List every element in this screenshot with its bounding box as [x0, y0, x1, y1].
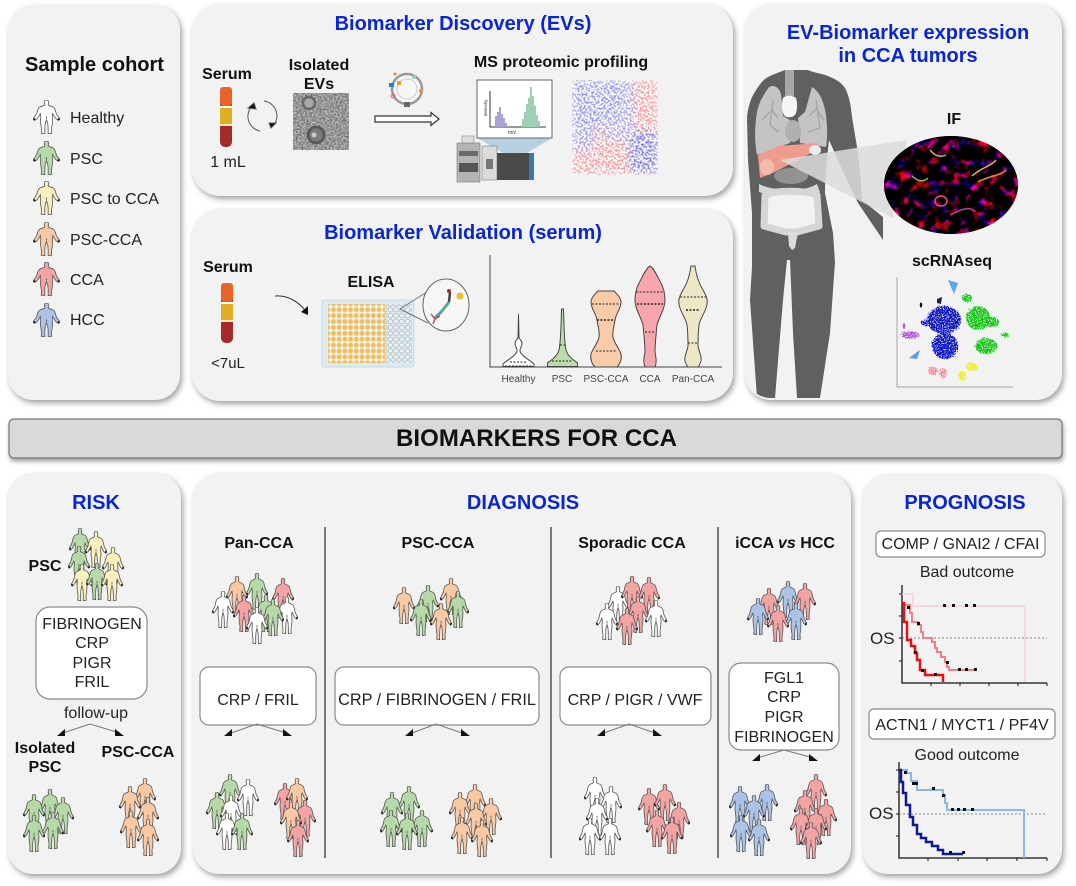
chart: mass spectrum: m/z: [508, 130, 517, 136]
label: sample volume: 1 mL: [210, 154, 246, 171]
label: PSC: PSC: [29, 558, 62, 575]
violin: CCA: [635, 266, 665, 367]
axis labels: Pan-CCA: [672, 374, 714, 385]
icon: extracellular vesicle: [389, 72, 423, 107]
chart: scRNAseq t-SNE plot: [897, 277, 1013, 387]
people: PSC-CCA mixed: [393, 578, 469, 640]
panel: prognosis: [863, 474, 1062, 874]
people: iCCA: [790, 774, 837, 859]
image: immunofluorescence: [884, 136, 1018, 234]
micrograph: isolated EVs: [293, 93, 349, 150]
heading: prognosis: PROGNOSIS: [904, 492, 1026, 514]
illustration: zoom cone: [780, 140, 907, 218]
legend: patient groups: PSC: [70, 151, 103, 168]
violin: Pan-CCA: [679, 266, 707, 367]
violin: Healthy: [503, 314, 534, 366]
arrows: sporadic split: [597, 724, 662, 736]
heading: sample cohort: Sample cohort: [25, 54, 164, 76]
chart: bad outcome survival curves: OS: [870, 629, 895, 648]
chart: violin plots: [490, 255, 722, 385]
panel: diagnosis: [193, 473, 851, 874]
label: good outcome: Good outcome: [915, 747, 1020, 764]
label: sample volume: <7uL: [211, 355, 245, 372]
icon: centrifuge arrows: [248, 101, 277, 131]
column: sporadic CCA: [560, 535, 711, 855]
arrows: Pan-CCA split: [224, 724, 292, 736]
label: PSC-CCA: PSC-CCA: [102, 744, 175, 761]
people: PSC-CCA cases: [449, 784, 502, 857]
arrows: PSC-CCA split: [405, 724, 470, 736]
people: PSC-CCA: [119, 778, 159, 856]
box: bad outcome markers: COMP / GNAI2 / CFAI: [882, 536, 1039, 553]
violin: PSC-CCA: [591, 291, 621, 367]
chart: bad outcome survival curves: [870, 585, 1047, 686]
people: HCC: [729, 784, 778, 856]
banner: biomarkers for CCA: BIOMARKERS FOR CCA: [396, 425, 677, 452]
label: isolated PSC: PSC: [29, 759, 62, 776]
box: sporadic biomarkers: [560, 667, 711, 725]
heading: EV-biomarker expression: EV-Biomarker expression: [787, 22, 1029, 44]
label: isolated EVs: Isolated: [289, 57, 349, 74]
arrows: risk split: [57, 724, 124, 736]
box: iCCA vs HCC biomarkers: [729, 663, 839, 750]
people: iCCA and HCC mixed: [747, 581, 816, 642]
axis labels: PSC: [552, 374, 572, 385]
label: bad outcome: Bad outcome: [920, 564, 1014, 581]
column: Pan-CCA: Pan-CCA: [224, 535, 294, 552]
legend: patient groups: HCC: [70, 312, 105, 329]
people: PSC controls: [380, 786, 433, 850]
column: Pan-CCA: [200, 535, 316, 857]
box: risk biomarkers: CRP: [75, 635, 109, 652]
legend: patient groups: Healthy: [70, 110, 124, 127]
label: isolated PSC: Isolated: [15, 740, 75, 757]
axis labels: PSC-CCA: [583, 374, 629, 385]
panel: risk: [8, 473, 181, 874]
label: serum: Serum: [203, 259, 253, 276]
chart: mass spectrum: Intensity: [483, 99, 488, 116]
heading: diagnosis: DIAGNOSIS: [467, 492, 579, 514]
panel: biomarker validation: [192, 209, 733, 401]
column: iCCA vs HCC: iCCA vs HCC: [735, 535, 835, 552]
heading: risk: RISK: [72, 492, 120, 514]
legend: patient groups: PSC to CCA: [70, 191, 159, 208]
chart: mass spectrum: [477, 80, 552, 138]
heading: biomarker discovery: Biomarker Discovery (EVs): [335, 13, 591, 35]
icon: mass spectrometer: [457, 136, 552, 182]
box: risk biomarkers: PIGR: [72, 655, 112, 672]
people: sporadic CCA cases: [638, 784, 690, 854]
people: healthy controls: [579, 777, 622, 855]
legend: patient groups: PSC-CCA: [70, 232, 142, 249]
box: iCCA vs HCC biomarkers: FIBRINOGEN: [734, 729, 834, 746]
column: iCCA vs HCC: [729, 535, 839, 859]
heading: EV-biomarker expression: in CCA tumors: [838, 45, 978, 67]
people: sporadic mixed: [596, 576, 667, 645]
label: ELISA: ELISA: [347, 274, 395, 291]
people: Pan-CCA cases: [274, 778, 316, 857]
label: isolated EVs: EVs: [304, 76, 334, 93]
box: risk biomarkers: FIBRINOGEN: [42, 616, 142, 633]
column: PSC-CCA: PSC-CCA: [402, 535, 475, 552]
box: bad outcome markers: [876, 531, 1045, 557]
banner: biomarkers for CCA: [9, 419, 1062, 458]
illustration: human body with organs: [747, 70, 883, 398]
panel: EV-biomarker expression: [745, 4, 1062, 400]
people: Pan-CCA controls: [206, 774, 259, 850]
box: risk biomarkers: FRIL: [75, 674, 109, 691]
box: PSC-CCA biomarkers: CRP / FIBRINOGEN / FRIL: [338, 691, 536, 709]
people: PSC cohort: [68, 528, 124, 601]
people: isolated PSC: [23, 789, 74, 852]
panel: sample cohort: [8, 5, 180, 400]
box: iCCA vs HCC biomarkers: CRP: [767, 689, 801, 706]
label: IF: IF: [947, 111, 961, 128]
axis labels: [502, 374, 714, 385]
icon: antibody magnifier: [400, 279, 469, 331]
people: Pan-CCA mixed: [212, 573, 298, 644]
box: Pan-CCA biomarkers: CRP / FRIL: [217, 692, 299, 709]
chart: good outcome survival curves: OS: [869, 804, 894, 823]
box: good outcome markers: ACTN1 / MYCT1 / PF4V: [875, 717, 1049, 734]
arrow: serum to ELISA: [275, 296, 308, 315]
icon: serum tube: [221, 283, 233, 343]
box: Pan-CCA biomarkers: [200, 667, 316, 725]
box: good outcome markers: [869, 709, 1055, 739]
label: follow-up: follow-up: [64, 705, 128, 722]
heading: biomarker validation: Biomarker Validation (serum): [324, 222, 602, 244]
axis labels: Healthy: [502, 374, 535, 385]
legend: patient groups: CCA: [70, 272, 104, 289]
label: serum: Serum: [202, 66, 252, 83]
box: PSC-CCA biomarkers: [335, 667, 539, 725]
arrows: iCCA vs HCC split: [752, 750, 818, 761]
box: iCCA vs HCC biomarkers: PIGR: [764, 709, 804, 726]
column: PSC-CCA: [335, 535, 539, 857]
violin: PSC: [548, 309, 578, 366]
column: sporadic CCA: Sporadic CCA: [578, 535, 686, 552]
legend: patient groups: [33, 100, 159, 337]
panel: biomarker discovery: [192, 4, 733, 196]
axis labels: CCA: [639, 374, 661, 385]
chart: good outcome survival curves: [869, 762, 1047, 861]
label: MS proteomic profiling: MS proteomic profiling: [474, 54, 648, 71]
label: scRNAseq: scRNAseq: [912, 253, 992, 270]
box: iCCA vs HCC biomarkers: FGL1: [764, 670, 804, 687]
arrow: hollow arrow to MS: [375, 112, 439, 126]
icon: ELISA plate: [322, 300, 414, 367]
chart: proteomic heatmap: [572, 80, 658, 175]
box: risk biomarkers: [36, 607, 147, 699]
box: sporadic biomarkers: CRP / PIGR / VWF: [568, 692, 703, 709]
icon: serum tube: [220, 87, 232, 147]
